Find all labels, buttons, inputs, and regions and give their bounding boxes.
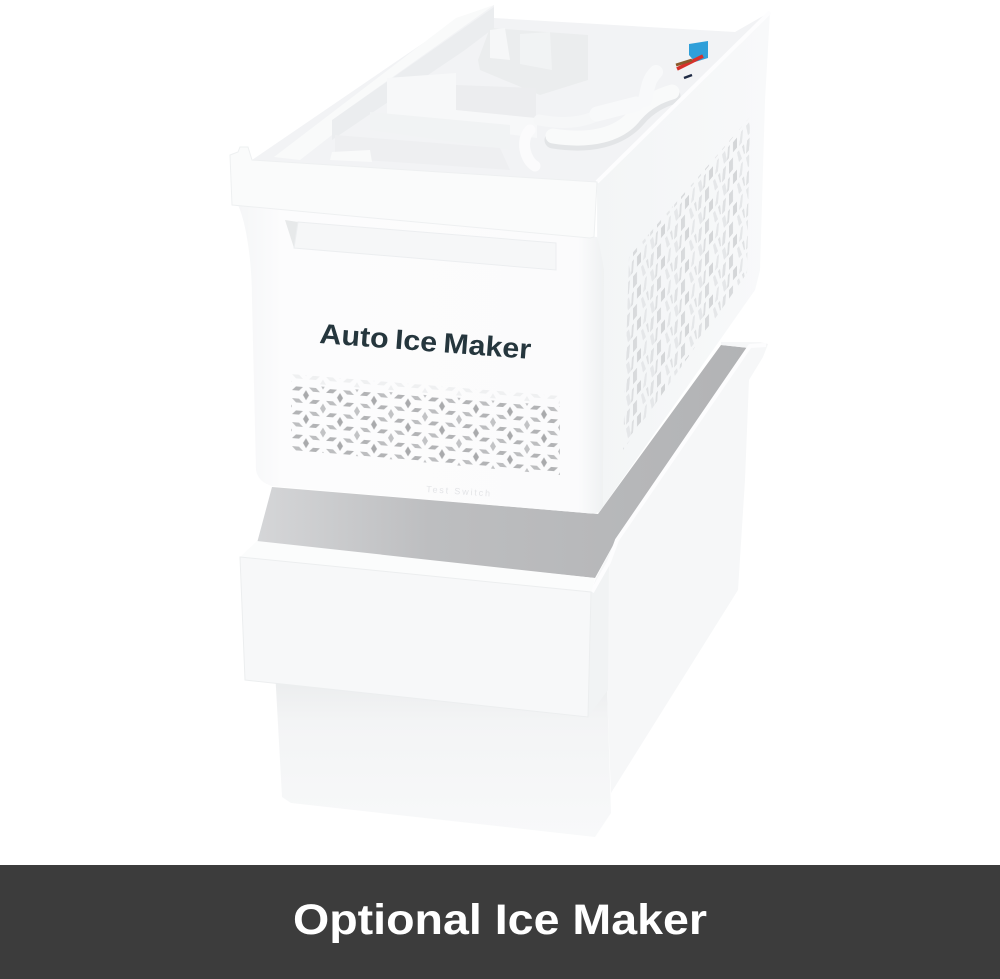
top tray <box>252 5 770 182</box>
ice maker unit <box>230 5 770 514</box>
product label: Auto Ice Maker <box>319 318 532 365</box>
front ventilation grille <box>291 384 560 475</box>
bin corner chamfer <box>588 562 609 717</box>
top front rim <box>230 147 597 238</box>
test switch mark: Test Switch <box>426 484 490 498</box>
embossed lattice row <box>291 374 560 408</box>
bin rim highlight <box>592 345 766 592</box>
tray ribs <box>387 73 537 138</box>
wire connector <box>676 41 708 78</box>
front panel <box>238 205 604 514</box>
bin interior <box>257 345 749 578</box>
bin lower body <box>275 670 611 837</box>
side panel with lattice <box>597 12 770 514</box>
caption text: Optional Ice Maker <box>293 896 707 944</box>
caption bar <box>0 865 1000 979</box>
back tower <box>478 28 588 95</box>
water tube <box>525 72 672 166</box>
bin right wall <box>591 342 768 793</box>
ice bin <box>240 342 768 837</box>
bin front panel <box>240 557 591 717</box>
bin front rim <box>240 541 595 593</box>
recessed handle <box>285 220 556 270</box>
